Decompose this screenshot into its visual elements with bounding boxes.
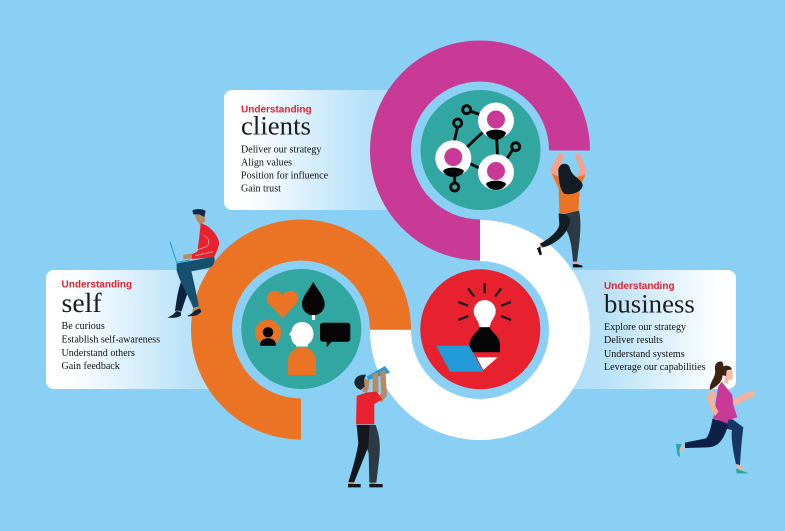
panel: understanding business: [560, 270, 736, 389]
panel: understanding business: business: [604, 289, 695, 319]
panel: understanding self: Gain feedback: [62, 361, 121, 372]
icon: client network: [420, 90, 540, 210]
figure: running woman: [676, 361, 755, 473]
panel: understanding self: [46, 270, 230, 389]
panel: understanding clients: Position for influence: [241, 171, 329, 182]
panel: understanding business: Explore our strategy: [604, 322, 686, 333]
ring: white business arc: [370, 220, 590, 440]
panel: understanding clients: Understanding: [241, 104, 312, 115]
panel: understanding business: Understand systems: [604, 349, 685, 360]
ring: orange self arc: [191, 219, 411, 440]
panel: understanding self: self: [62, 288, 102, 319]
panel: understanding self: Understanding: [62, 280, 132, 291]
ring: magenta clients arc: [370, 40, 590, 261]
figure: man with telescope: [348, 366, 390, 487]
panel: understanding clients: [224, 90, 400, 210]
panel: understanding self: Understand others: [62, 348, 135, 359]
panel: understanding clients: Align values: [241, 158, 292, 169]
figure: woman holding up the magenta ring: [537, 153, 587, 267]
panel: understanding self: Establish self-awareness: [62, 334, 160, 346]
panel: understanding clients: clients: [241, 111, 311, 141]
panel: understanding business: Leverage our capabilities: [604, 362, 706, 373]
icon: self awareness: [241, 269, 361, 389]
panel: understanding business: Understanding: [604, 281, 675, 292]
figure: man with laptop sitting on the orange ring: [167, 209, 219, 318]
panel: understanding clients: Deliver our strategy: [241, 145, 321, 156]
panel: understanding business: Deliver results: [604, 335, 663, 346]
panel: understanding self: Be curious: [62, 321, 105, 332]
icon: business lightbulb: [420, 269, 540, 389]
panel: understanding clients: Gain trust: [241, 184, 281, 195]
